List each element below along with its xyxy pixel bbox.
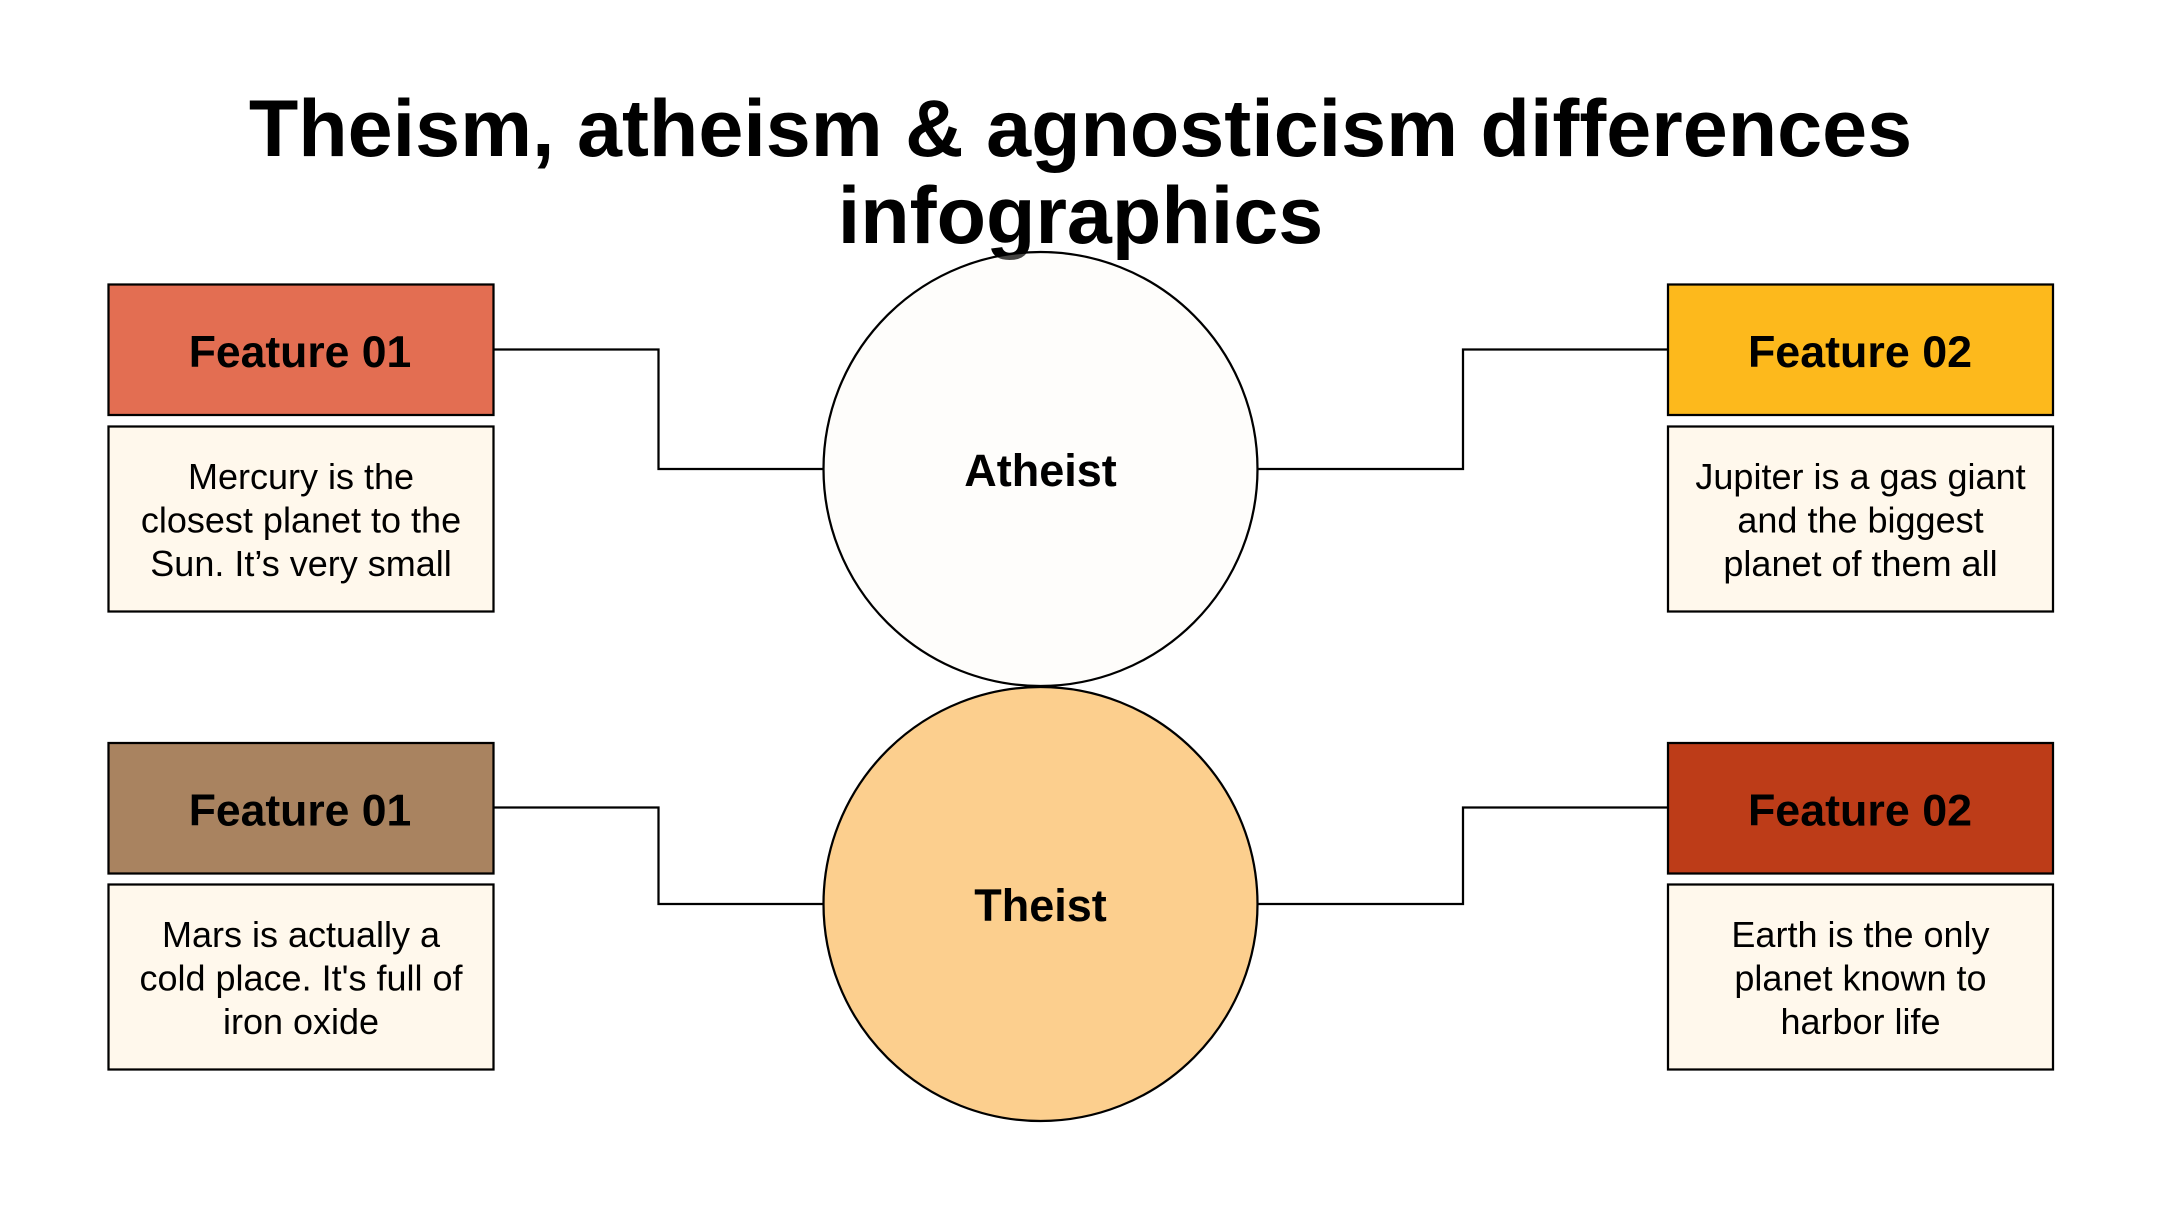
text block: Mercury: Mercury is the (188, 456, 414, 497)
text block: Jupiter: and the biggest (1737, 500, 1984, 540)
heading: Feature 02 bottom (1668, 743, 2053, 874)
heading: Feature 01 bottom: Feature 01 (189, 786, 411, 836)
text block: Jupiter (1668, 426, 2053, 612)
text block: Earth: harbor life (1780, 1001, 1941, 1042)
text block: Mars: iron oxide (223, 1001, 379, 1042)
connector: Feature 02 top to Atheist (1258, 350, 1668, 469)
heading: Feature 02 bottom: Feature 02 (1748, 786, 1972, 836)
circle: Theist: Theist (974, 880, 1107, 931)
text block: Mercury: Sun. It’s very small (150, 543, 452, 584)
panel: Feature 02 bottom (1668, 743, 2053, 1070)
circle: Atheist: Atheist (964, 445, 1117, 496)
panel: Feature 02 top (1668, 284, 2053, 612)
text block: Earth: Earth is the only (1731, 914, 1990, 955)
panel: Feature 01 top (108, 284, 494, 612)
connector: Feature 02 bottom to Theist (1258, 808, 1668, 904)
heading: Feature 01 bottom (108, 743, 494, 874)
text block: Jupiter: Jupiter is a gas giant (1695, 456, 2026, 497)
circle: Theist (824, 687, 1258, 1121)
heading: Feature 02 top: Feature 02 (1748, 327, 1972, 377)
title: infographics (838, 171, 1323, 261)
connector: Feature 01 top to Atheist (494, 350, 823, 469)
panel: Feature 01 bottom (108, 743, 494, 1070)
text block: Mars (108, 884, 494, 1070)
title (249, 84, 1912, 261)
text block: Mercury (108, 426, 494, 612)
text block: Earth: planet known to (1734, 958, 1987, 998)
heading: Feature 01 top (108, 284, 494, 415)
text block: Mars: Mars is actually a (162, 914, 441, 955)
heading: Feature 02 top (1668, 284, 2053, 415)
heading: Feature 01 top: Feature 01 (189, 328, 411, 377)
text block: Mercury: closest planet to the (141, 500, 461, 540)
text block: Mars: cold place. It's full of (139, 958, 464, 998)
title: Theism, atheism & agnosticism differences (249, 84, 1912, 174)
text block: Jupiter: planet of them all (1723, 543, 1998, 584)
connector: Feature 01 bottom to Theist (494, 808, 823, 904)
text block: Earth (1668, 884, 2053, 1070)
circle: Atheist (824, 252, 1258, 686)
